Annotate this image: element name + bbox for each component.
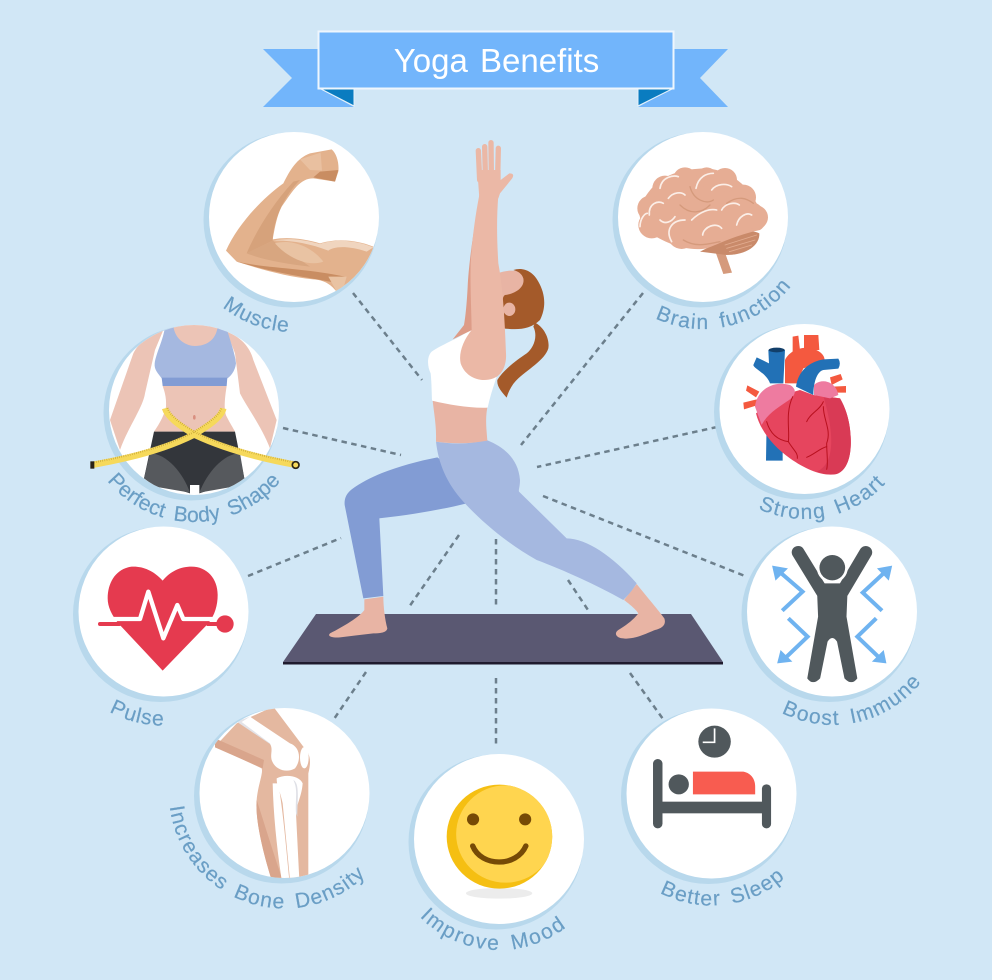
yoga woman figure xyxy=(329,143,665,639)
panel: better sleep xyxy=(621,708,796,906)
atria xyxy=(755,384,795,425)
hair xyxy=(502,269,544,329)
circle backing xyxy=(621,709,796,884)
front foot xyxy=(329,597,387,637)
label: Strong Heart: Strong Heart xyxy=(760,476,886,522)
hand xyxy=(477,143,513,198)
ear xyxy=(503,303,515,316)
label: Better Sleep: Better Sleep xyxy=(661,871,783,906)
label: Boost Immune: Boost Immune xyxy=(782,677,920,726)
banner left fold xyxy=(321,89,354,106)
label: Improve Mood: Improve Mood xyxy=(421,908,565,950)
title: Yoga Benefits xyxy=(394,42,599,79)
circle backing xyxy=(714,324,889,500)
banner left tail xyxy=(263,49,354,107)
label: Pulse: Pulse xyxy=(110,699,163,726)
panel: brain function xyxy=(612,132,790,330)
icon: smiley face xyxy=(447,785,555,899)
panel: improve mood xyxy=(408,754,584,950)
icon: anatomical heart xyxy=(743,335,851,475)
circle backing xyxy=(408,754,584,930)
ventricles xyxy=(756,390,851,475)
far arm xyxy=(453,213,478,339)
panel: perfect body shape xyxy=(90,325,300,525)
panel: boost immune xyxy=(742,526,920,726)
back foot xyxy=(616,584,665,639)
panel: strong heart xyxy=(714,324,890,522)
brain folds xyxy=(640,173,757,252)
circle backing xyxy=(73,527,248,702)
icon: person with arrows xyxy=(772,552,892,682)
label: Muscle: Muscle xyxy=(224,296,288,332)
circle backing xyxy=(612,132,788,308)
waist xyxy=(433,401,487,443)
banner right fold xyxy=(638,89,672,106)
sports bra xyxy=(428,329,497,408)
icon: brain xyxy=(637,167,768,274)
circle backing xyxy=(742,527,916,702)
icon: bed with clock xyxy=(653,726,771,828)
brain lobes xyxy=(637,167,768,249)
yoga mat xyxy=(283,614,723,664)
back leg xyxy=(436,440,637,600)
panel: increases bone density xyxy=(170,708,370,909)
icon: knee joint xyxy=(215,707,310,880)
dashed connector lines xyxy=(248,293,745,747)
cerebellum xyxy=(700,231,759,255)
raised arm xyxy=(460,195,506,380)
banner main ribbon xyxy=(318,32,674,88)
icon: flexed arm xyxy=(226,149,373,292)
face xyxy=(498,271,527,328)
panel: muscle xyxy=(204,132,379,332)
banner right tail xyxy=(638,49,728,107)
label: Increases Bone Density: Increases Bone Density xyxy=(170,806,364,909)
label: Perfect Body Shape: Perfect Body Shape xyxy=(108,472,279,525)
measuring tape xyxy=(92,407,297,465)
icon: waist with measuring tape xyxy=(90,320,299,493)
brain stem xyxy=(716,253,732,274)
circle backing xyxy=(194,708,369,884)
ponytail xyxy=(497,323,549,398)
title banner xyxy=(263,32,728,107)
circle backing xyxy=(204,132,378,308)
icon: heart with ECG pulse xyxy=(100,567,234,671)
label: Brain function: Brain function xyxy=(656,281,790,330)
bent front leg xyxy=(345,457,470,598)
panel: pulse xyxy=(73,526,248,726)
circle backing xyxy=(104,326,278,500)
